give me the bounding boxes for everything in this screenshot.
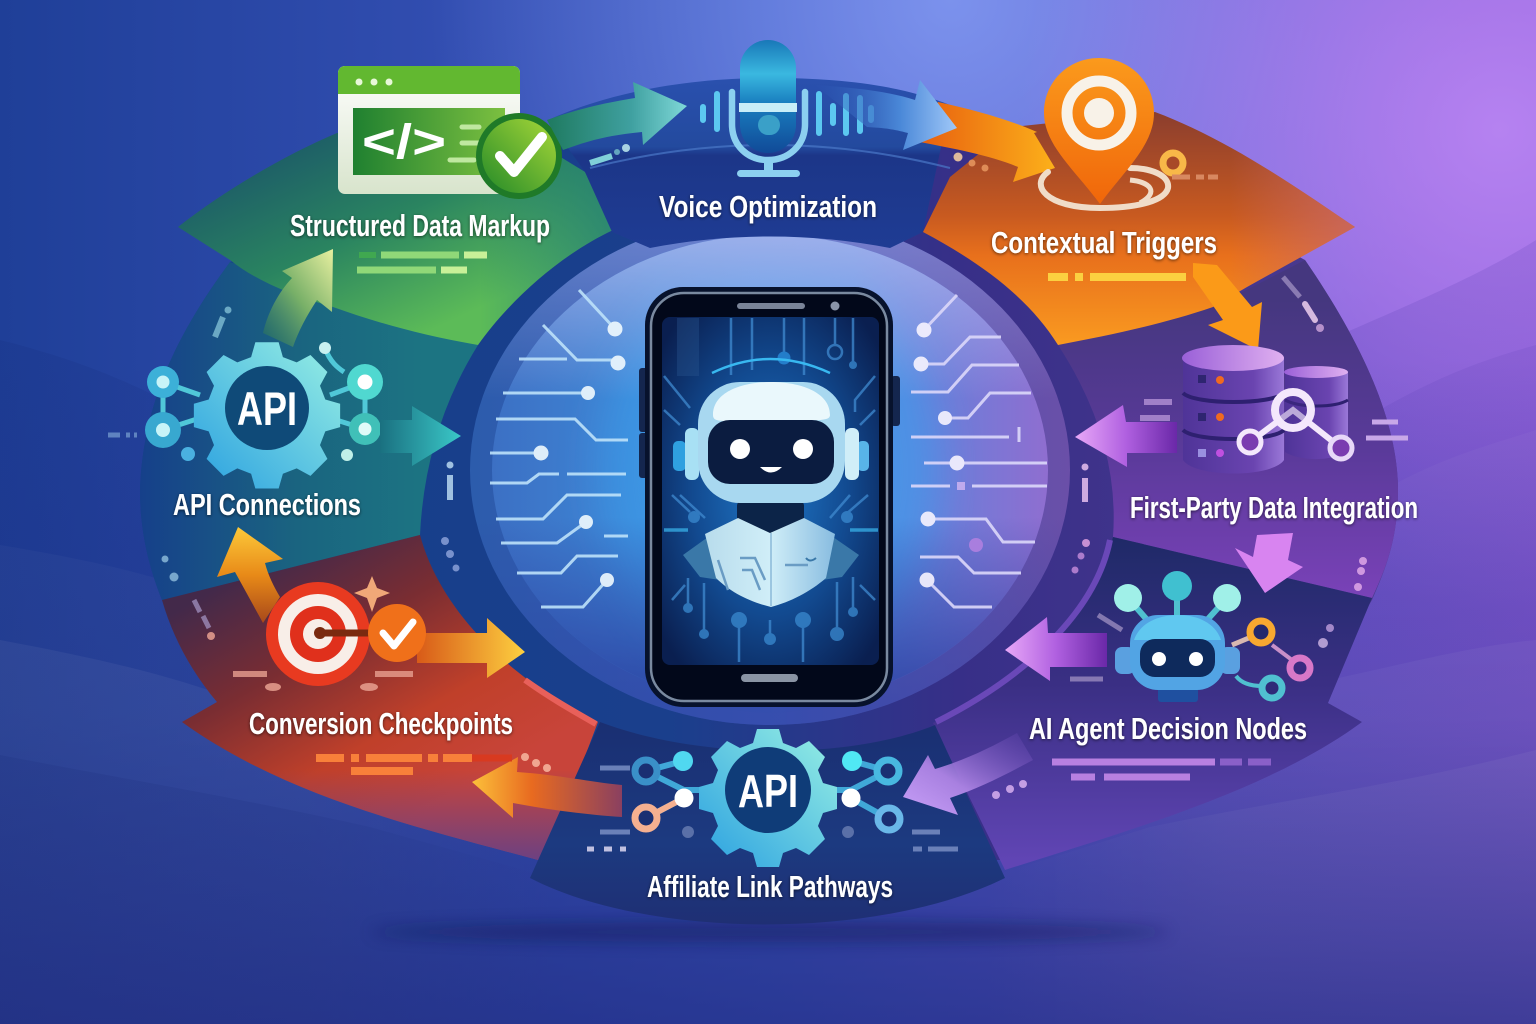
circuit traces left bbox=[490, 290, 628, 607]
panel: api connections segment bbox=[140, 262, 478, 600]
central dark ring bbox=[140, 110, 1398, 860]
arrow: conversion inward bbox=[417, 618, 525, 678]
arrow: first-party inward bbox=[1075, 405, 1177, 467]
arrow: conversion to api bbox=[217, 527, 283, 623]
panel: affiliate link segment bbox=[530, 722, 1005, 924]
label: voice optimization: Voice Optimization bbox=[659, 189, 877, 224]
label: affiliate link pathways: Affiliate Link Pathways bbox=[647, 869, 893, 904]
circuit traces right bbox=[911, 295, 1047, 607]
arrow: into contextual triggers bbox=[920, 102, 1055, 182]
arrow: api inward bbox=[380, 406, 461, 466]
label: first-party data integration: First-Party Data Integration bbox=[1130, 490, 1418, 525]
arrow: structured data to voice bbox=[547, 82, 687, 150]
label: contextual triggers: Contextual Triggers bbox=[991, 225, 1217, 260]
arrow: ai agent to affiliate bbox=[903, 733, 1033, 815]
icon: left api gear bbox=[145, 342, 383, 489]
panel: first-party data segment bbox=[1058, 260, 1398, 598]
decorative text bars bbox=[108, 144, 1408, 849]
panel: voice optimization segment bbox=[548, 78, 950, 248]
panel: conversion checkpoints segment bbox=[162, 535, 598, 862]
icon: microphone bbox=[703, 40, 871, 177]
arrow: first-party to ai agent bbox=[1235, 533, 1303, 593]
arrow: ai agent inward bbox=[1005, 617, 1107, 681]
icon: ai agent robot bbox=[1114, 571, 1310, 702]
panel: contextual triggers segment bbox=[923, 112, 1355, 345]
icon: bottom api gear: API bbox=[738, 765, 798, 817]
arrow: affiliate to conversion bbox=[472, 757, 622, 818]
icon: code window bbox=[338, 66, 562, 199]
arrow: api to structured data bbox=[263, 249, 333, 347]
label: api connections: API Connections bbox=[173, 487, 361, 522]
icon: bottom api gear bbox=[635, 729, 900, 867]
label: conversion checkpoints: Conversion Checkpoints bbox=[249, 706, 513, 741]
inner circle bbox=[470, 215, 1070, 725]
label: structured data markup: Structured Data Markup bbox=[290, 208, 550, 243]
icon: code window: </> bbox=[362, 116, 446, 169]
robot bbox=[673, 359, 869, 607]
arrow: contextual to first-party bbox=[1193, 263, 1262, 350]
panel: structured data markup segment bbox=[178, 120, 613, 345]
icon: left api gear: API bbox=[237, 382, 297, 435]
label: ai agent decision nodes: AI Agent Decision Nodes bbox=[1029, 711, 1307, 746]
screen circuit bbox=[664, 318, 878, 662]
phone bbox=[639, 287, 900, 707]
arrow: voice to contextual bbox=[815, 80, 957, 150]
panel: ai agent segment bbox=[933, 537, 1372, 870]
icon: location pin bbox=[1041, 58, 1218, 208]
icon: conversion target bbox=[266, 576, 426, 686]
icon: database bbox=[1182, 345, 1352, 474]
